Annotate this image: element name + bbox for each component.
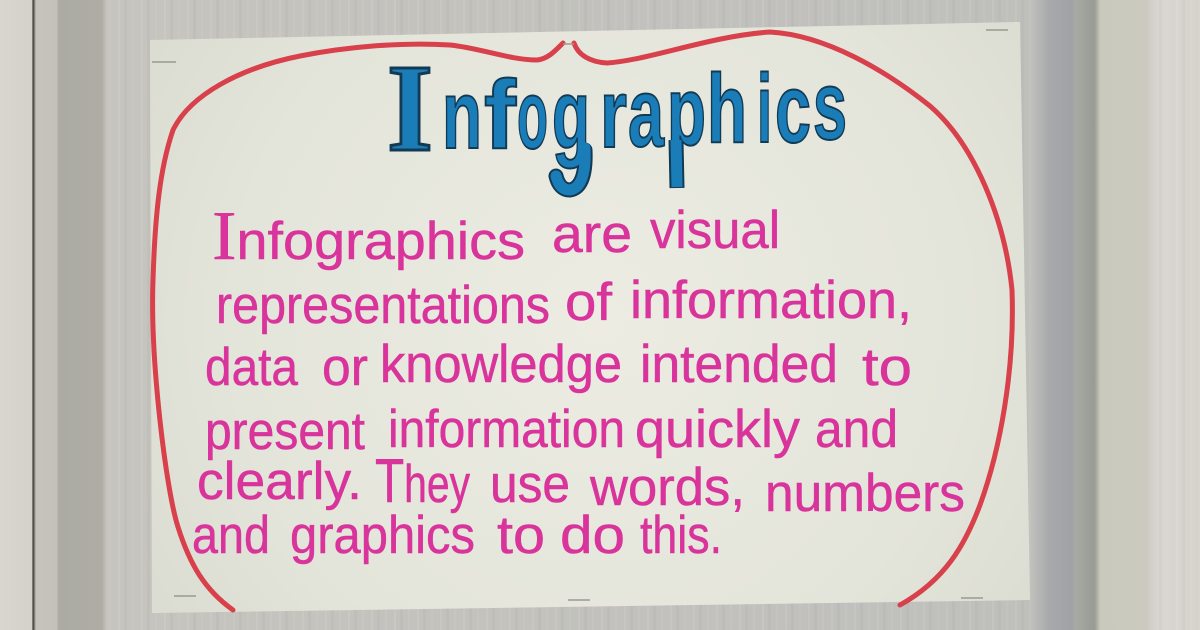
title: Infographics: h xyxy=(707,54,747,163)
body text: definition of infographics: use xyxy=(490,455,570,514)
title: Infographics: i xyxy=(757,54,772,163)
body text: definition of infographics: to xyxy=(862,338,912,397)
body text: definition of infographics: are xyxy=(552,205,632,264)
title: Infographics: I xyxy=(387,40,433,178)
body text: definition of infographics: knowledge xyxy=(380,335,622,394)
g tail xyxy=(556,150,585,190)
title: Infographics: c xyxy=(775,54,811,163)
title: Infographics: g xyxy=(552,60,590,169)
red apple-shaped border xyxy=(153,32,1012,610)
body text: definition of infographics: to xyxy=(497,506,545,565)
title: Infographics: r xyxy=(600,59,627,168)
body text: definition of infographics: representations xyxy=(216,276,550,335)
body text: definition of infographics: information xyxy=(388,400,625,459)
title: Infographics: s xyxy=(813,51,847,160)
body text: definition of infographics: They xyxy=(375,447,470,516)
body text: definition of infographics: this. xyxy=(640,506,722,565)
title: Infographics: a xyxy=(628,58,665,167)
body text: definition of infographics: visual xyxy=(650,201,780,260)
body text: definition of infographics xyxy=(192,198,965,565)
body text: definition of infographics: clearly. xyxy=(197,452,362,511)
title: Infographics: f xyxy=(484,60,517,169)
title: Infographics xyxy=(387,40,847,190)
body text: definition of infographics: information, xyxy=(630,271,912,330)
body text: definition of infographics: data xyxy=(205,338,298,397)
body text: definition of infographics: Infographics xyxy=(212,198,525,275)
body text: definition of infographics: do xyxy=(560,506,625,565)
body text: definition of infographics: numbers xyxy=(765,464,965,523)
body text: definition of infographics: present xyxy=(205,402,365,461)
title: Infographics: p xyxy=(667,57,706,166)
body text: definition of infographics: words, xyxy=(589,458,745,517)
body text: definition of infographics: or xyxy=(322,338,368,397)
body text: definition of infographics: and xyxy=(815,400,898,459)
body text: definition of infographics: and xyxy=(192,506,270,565)
body text: definition of infographics: intended xyxy=(640,335,838,394)
body text: definition of infographics: of xyxy=(565,273,612,332)
staple marks xyxy=(152,30,1008,600)
body text: definition of infographics: quickly xyxy=(635,400,800,459)
title: Infographics: n xyxy=(442,60,482,169)
title: Infographics: o xyxy=(517,60,548,169)
p stem xyxy=(676,140,677,188)
poster paper xyxy=(150,22,1030,613)
body text: definition of infographics: graphics xyxy=(290,506,475,565)
